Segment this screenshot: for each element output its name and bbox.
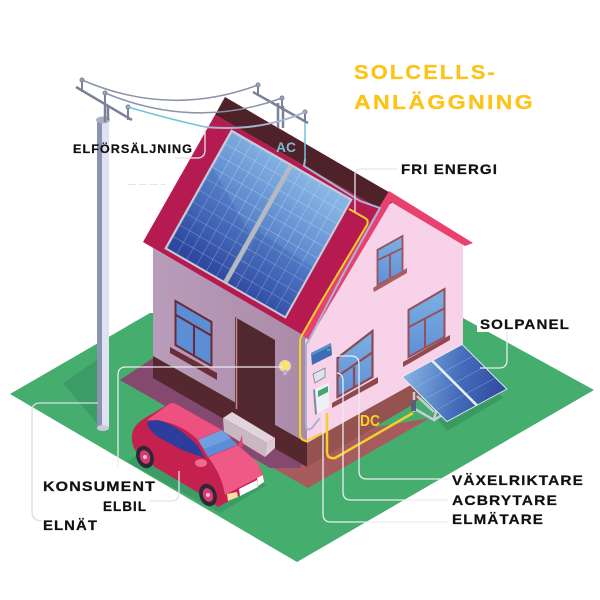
rear wheel [133, 443, 157, 471]
faint mark [128, 184, 165, 186]
roof left slope [143, 115, 391, 335]
callout line: elförsäljning [175, 127, 205, 158]
title: SOLCELLS- [354, 62, 497, 84]
callout line: elmätare [323, 410, 448, 522]
AC breaker [313, 368, 325, 383]
label: acbrytare: ACBRYTARE [452, 492, 558, 508]
DC cable to ground panel [327, 413, 413, 458]
label: elförsäljning: ELFÖRSÄLJNING [73, 141, 193, 156]
roof solar panels [164, 129, 353, 319]
label: elmätare: ELMÄTARE [452, 511, 544, 527]
right wall roof edge [302, 191, 473, 340]
title: ANLÄGGNING [354, 91, 535, 114]
house left dark base [153, 356, 307, 467]
callout line: acbrytare [337, 373, 448, 500]
upper right window [373, 235, 407, 292]
right crossarm [253, 83, 308, 128]
panel junction box [411, 400, 416, 411]
ground solar panel [401, 344, 508, 431]
car roof [147, 403, 222, 440]
roof ridge [215, 97, 399, 208]
label: elbil: ELBIL [103, 498, 147, 514]
middle right window [403, 288, 450, 367]
car headlights [227, 475, 264, 501]
inverter box [311, 343, 332, 365]
utility pole [96, 116, 110, 431]
car body side [132, 402, 264, 507]
ground lawn [10, 313, 594, 562]
car hood [208, 445, 263, 495]
left crossarm [76, 78, 132, 122]
callout line: fri energi [355, 169, 397, 212]
house left wall [153, 248, 307, 443]
light bulb [279, 360, 291, 375]
car mirror [195, 435, 243, 467]
panel stand [414, 392, 447, 420]
label AC: AC [276, 139, 296, 155]
car windshield [198, 430, 238, 457]
title [354, 62, 535, 114]
label: solpanel [477, 312, 573, 332]
car [127, 402, 267, 513]
label: elnät: ELNÄT [43, 517, 98, 533]
pole shadow [63, 360, 109, 431]
DC cable from roof [300, 209, 368, 441]
callout line: elnät [32, 403, 98, 521]
AC cable [304, 112, 380, 429]
house right brick base [307, 356, 463, 467]
house right wall [305, 195, 463, 443]
label: fri energi: FRI ENERGI [401, 161, 498, 177]
front door [235, 317, 275, 431]
front wheel [196, 481, 220, 509]
label: växelriktare: VÄXELRIKTARE [452, 472, 584, 488]
callout line: konsument [118, 367, 283, 467]
power lines [82, 80, 305, 128]
car side window [147, 420, 205, 458]
door step [223, 412, 275, 457]
electricity meter [313, 382, 329, 415]
house plinth [120, 358, 430, 488]
callout line: växelriktare [333, 356, 450, 479]
callout line: solpanel [480, 332, 507, 368]
label: solpanel: SOLPANEL [480, 316, 570, 332]
label: konsument: KONSUMENT [43, 478, 156, 494]
left window [170, 300, 217, 380]
label DC: DC [360, 413, 380, 430]
lower right window [332, 330, 378, 408]
panel shadow [430, 390, 503, 431]
callout line: elbil [150, 471, 179, 501]
car shadow [127, 445, 267, 513]
